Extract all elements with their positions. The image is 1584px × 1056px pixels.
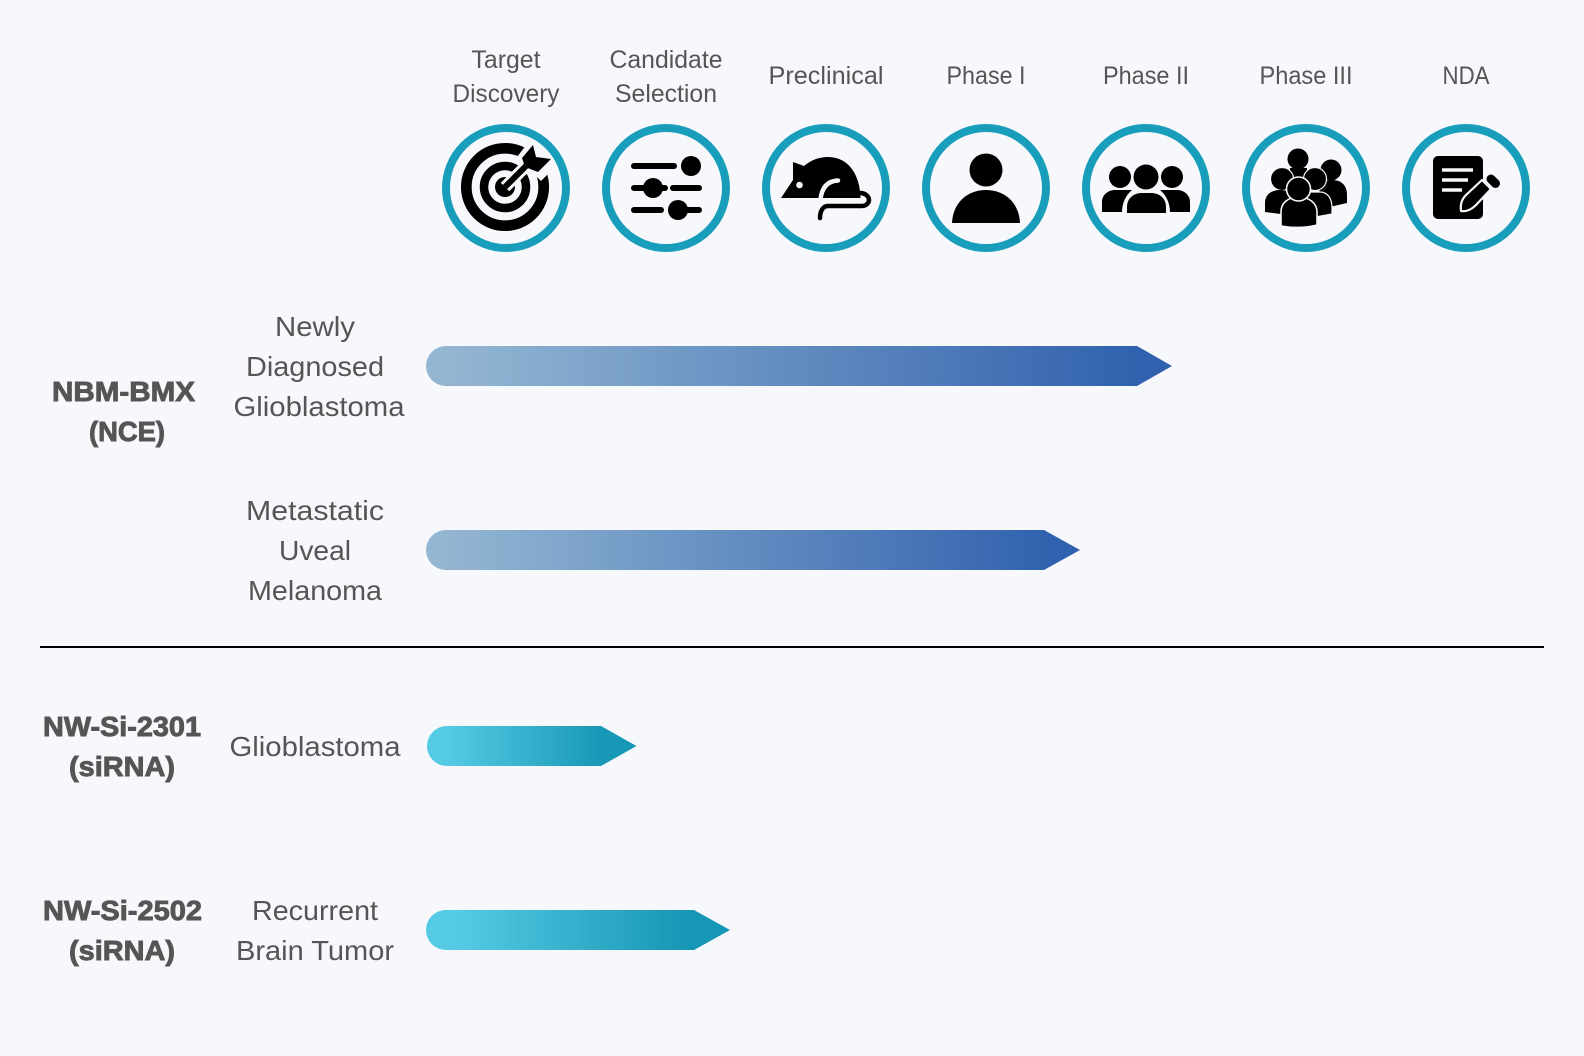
drug label: NW-Si-2301 (siRNA): (siRNA) bbox=[69, 751, 175, 782]
indication label: Newly Diagnosed Glioblastoma bbox=[234, 311, 405, 422]
phase label: Target Discovery bbox=[452, 46, 560, 108]
indication label: Recurrent Brain Tumor: Brain Tumor bbox=[236, 935, 394, 966]
progress arrow: Newly Diagnosed Glioblastoma bbox=[426, 346, 1172, 386]
phase label: Phase II: Phase II bbox=[1103, 62, 1189, 90]
progress arrow: Recurrent Brain Tumor bbox=[426, 910, 730, 950]
indication label: Metastatic Uveal Melanoma: Melanoma bbox=[248, 575, 382, 606]
indication label: Recurrent Brain Tumor bbox=[236, 895, 394, 966]
phase label: Candidate Selection: Candidate bbox=[610, 46, 722, 74]
indication label: Metastatic Uveal Melanoma: Metastatic bbox=[246, 495, 384, 526]
icon: three people bbox=[1086, 128, 1206, 248]
drug label: NBM-BMX (NCE): NBM-BMX bbox=[52, 376, 195, 407]
phase label: Phase III: Phase III bbox=[1260, 62, 1352, 90]
phase label: Candidate Selection bbox=[610, 46, 722, 108]
icon: crowd of people bbox=[1246, 128, 1366, 248]
drug label: NW-Si-2502 (siRNA): (siRNA) bbox=[69, 935, 175, 966]
indication label: Newly Diagnosed Glioblastoma: Diagnosed bbox=[246, 351, 384, 382]
indication label: Metastatic Uveal Melanoma: Uveal bbox=[279, 535, 351, 566]
drug label: NW-Si-2502 (siRNA): NW-Si-2502 bbox=[43, 895, 202, 926]
phase label: Target Discovery: Discovery bbox=[452, 80, 560, 108]
phase label: Target Discovery: Target bbox=[472, 46, 541, 74]
phase label: Candidate Selection: Selection bbox=[615, 80, 717, 108]
drug label: NW-Si-2502 (siRNA) bbox=[43, 895, 202, 966]
phase label: Phase I: Phase I bbox=[946, 62, 1026, 90]
icon: sliders bbox=[606, 128, 726, 248]
icon: mouse bbox=[766, 128, 886, 248]
indication label: Recurrent Brain Tumor: Recurrent bbox=[252, 895, 378, 926]
icon: target with arrow bbox=[446, 128, 566, 248]
indication label: Newly Diagnosed Glioblastoma: Glioblastoma bbox=[234, 391, 405, 422]
drug label: NW-Si-2301 (siRNA) bbox=[43, 711, 201, 782]
drug label: NW-Si-2301 (siRNA): NW-Si-2301 bbox=[43, 711, 201, 742]
phase label: NDA: NDA bbox=[1442, 62, 1490, 90]
progress arrow: Glioblastoma bbox=[427, 726, 636, 766]
indication label: Glioblastoma: Glioblastoma bbox=[230, 731, 401, 762]
indication label: Newly Diagnosed Glioblastoma: Newly bbox=[275, 311, 355, 342]
phase label: Preclinical: Preclinical bbox=[768, 62, 884, 90]
icon: single person bbox=[926, 128, 1046, 248]
drug label: NBM-BMX (NCE) bbox=[52, 376, 195, 447]
indication label: Metastatic Uveal Melanoma bbox=[246, 495, 384, 606]
icon: document with pen bbox=[1406, 128, 1526, 248]
progress arrow: Metastatic Uveal Melanoma bbox=[426, 530, 1080, 570]
drug label: NBM-BMX (NCE): (NCE) bbox=[89, 416, 165, 447]
